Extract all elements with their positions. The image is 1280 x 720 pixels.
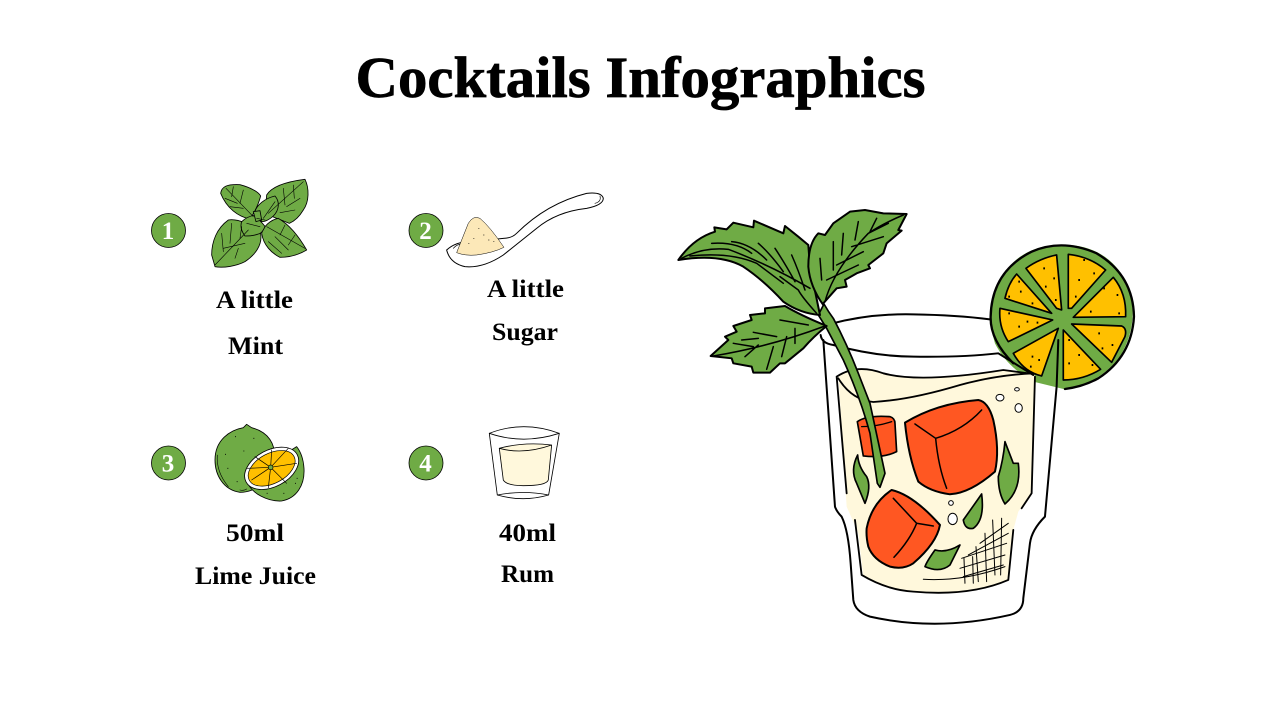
ingredient 4: rum <box>409 427 559 588</box>
ingredient 1: mint <box>152 179 308 360</box>
label: 50ml Lime Juice: Lime Juice <box>195 563 316 590</box>
number badge 3 <box>152 446 186 480</box>
label: A little Sugar: A little <box>487 276 564 303</box>
label: A little Mint <box>216 287 293 360</box>
label: 40ml Rum <box>499 520 556 588</box>
number badge 1 <box>152 214 186 248</box>
label: A little Mint: A little <box>216 287 293 314</box>
number badge 3: 3 <box>162 450 174 478</box>
label: A little Mint: Mint <box>228 333 284 360</box>
lime slice <box>991 245 1134 389</box>
ingredient 3: lime juice <box>152 424 316 590</box>
label: A little Sugar <box>487 276 564 346</box>
label: 50ml Lime Juice: 50ml <box>226 520 284 547</box>
illustration: mojito glass <box>678 210 1134 624</box>
icon: spoon of sugar <box>447 193 603 267</box>
ice cube: large <box>905 400 997 494</box>
texture hatching <box>923 518 1008 583</box>
mint leaves <box>678 210 907 373</box>
label: 40ml Rum: Rum <box>501 561 554 588</box>
bubbles <box>948 388 1022 525</box>
number badge 4: 4 <box>419 450 432 478</box>
ice cube: lower <box>866 490 940 568</box>
number badge 2 <box>409 214 443 248</box>
liquid outline <box>837 369 1035 593</box>
icon: halved lime <box>215 424 306 501</box>
label: 40ml Rum: 40ml <box>499 520 556 547</box>
number badge 2: 2 <box>419 218 432 245</box>
icon: shot glass of rum <box>489 427 559 499</box>
glass outline <box>821 314 1058 624</box>
label: 50ml Lime Juice <box>195 520 316 590</box>
liquid <box>838 369 1035 593</box>
number badge 1: 1 <box>162 218 174 245</box>
icon: mint sprig <box>212 179 308 267</box>
ingredient 2: sugar <box>409 193 603 346</box>
mint stem <box>818 304 885 487</box>
ice cube: small <box>857 416 897 457</box>
number badge 4 <box>409 446 443 480</box>
label: A little Sugar: Sugar <box>492 319 558 346</box>
floating mint pieces <box>854 442 1019 570</box>
title: Cocktails Infographics <box>356 45 926 110</box>
